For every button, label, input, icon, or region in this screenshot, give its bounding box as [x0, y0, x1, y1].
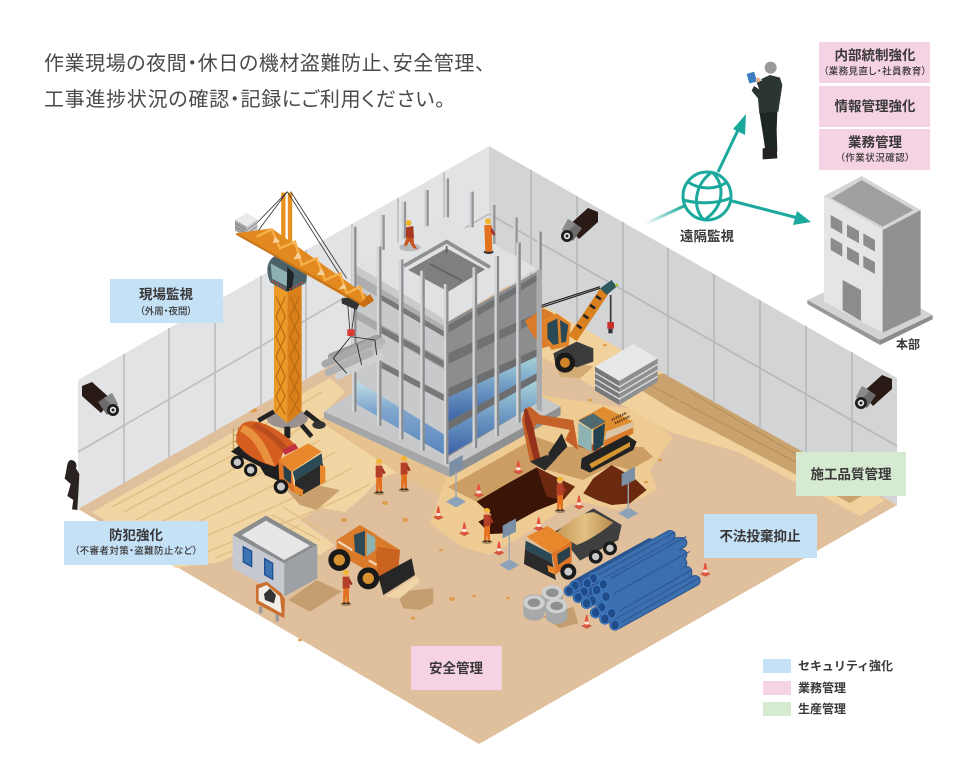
icon: globe — [683, 172, 731, 220]
excavator: boom — [522, 407, 578, 462]
label panel: information management: 情報管理強化 — [834, 98, 916, 114]
label panel: site monitoring: 現場監視 — [139, 286, 193, 302]
manager: hand — [756, 78, 760, 82]
mobile crane: rear body — [525, 308, 553, 348]
excavator: far crawler — [548, 433, 567, 464]
wall: left — [78, 146, 489, 509]
crane: cabin — [267, 254, 307, 292]
excavator — [522, 407, 637, 473]
head office building — [807, 176, 933, 351]
dump truck: bed — [555, 508, 622, 561]
head office: windows — [831, 215, 875, 274]
worker: standing on top floor — [484, 218, 496, 254]
legend: production: 生産管理 — [798, 701, 846, 716]
ground: shaded wood beneath excavator — [448, 437, 653, 502]
legend: business: 業務管理 — [798, 680, 846, 695]
manager: jacket — [752, 75, 782, 113]
excavator: bucket — [530, 455, 557, 471]
label: remote monitoring: 遠隔監視 — [680, 228, 734, 244]
mixer truck: drum — [236, 421, 298, 467]
camera: left wall — [82, 382, 119, 416]
remote monitoring network — [645, 114, 811, 244]
label panel: business management: 業務管理 — [848, 134, 902, 150]
label panel: illegal dumping: 不法投棄抑止 — [720, 528, 800, 544]
crane: trolley and hook — [342, 298, 359, 336]
building: left face — [355, 265, 447, 462]
mixer truck: chassis — [231, 445, 280, 482]
mobile crane: shadow — [553, 358, 593, 378]
bulldozer: shadow — [397, 588, 433, 610]
label panel: safety management: 安全管理 — [429, 660, 483, 676]
excavation site — [477, 407, 647, 534]
camera: right wall — [855, 375, 892, 409]
label panel: internal control: 内部統制強化 — [834, 47, 916, 63]
building: slab — [324, 340, 561, 477]
ground — [78, 273, 897, 744]
arrow: to manager — [718, 114, 746, 172]
crane: counterweight — [235, 213, 257, 237]
label panel: illegal dumping — [704, 514, 817, 558]
traffic cones — [433, 461, 711, 629]
mixer truck: shadow — [287, 485, 340, 510]
manager: legs — [759, 112, 777, 152]
ground: tan strip around slab — [318, 408, 450, 495]
building: top floor with opening — [357, 217, 537, 322]
dump truck — [524, 508, 622, 580]
bulldozer: blade — [378, 558, 415, 595]
excavation: dirt pile — [583, 465, 647, 505]
slab stack — [595, 344, 658, 405]
ground: dots — [249, 344, 682, 641]
mixer truck: ladder — [233, 427, 238, 452]
label panel: business management — [819, 129, 930, 170]
dump truck: wheels — [560, 541, 617, 580]
bulldozer: body — [337, 525, 400, 577]
mobile crane: chassis and wheel — [553, 342, 593, 373]
bulldozer: dirt — [385, 577, 420, 598]
head office: left face — [824, 196, 883, 333]
title: 工事進捗状況の確認・記録にご利用ください。 — [44, 88, 445, 111]
label panel: site monitoring: （外周・夜間） — [140, 306, 192, 318]
arrow: to head office — [732, 201, 811, 225]
ground: wood around building and pit — [430, 395, 673, 555]
label panel: crime prevention: 防犯強化 — [109, 527, 163, 543]
site signs — [446, 455, 638, 571]
legend — [763, 658, 893, 716]
label panel: business management: （作業状況確認） — [840, 152, 910, 164]
label panel: construction quality: 施工品質管理 — [810, 466, 892, 482]
site office: roof — [233, 516, 317, 563]
label panel: crime prevention — [64, 521, 208, 565]
manager: shoes — [763, 147, 777, 159]
bulldozer — [328, 525, 433, 610]
site sign — [256, 582, 285, 622]
wall: right — [489, 146, 897, 505]
person silhouette at wall — [65, 460, 79, 510]
head office: right face — [883, 210, 921, 333]
ground: wood band along right wall — [520, 292, 885, 516]
site office: shadow — [288, 580, 342, 612]
ground: dark wood band along right wall — [630, 372, 872, 503]
head office: roof — [824, 176, 921, 230]
building: front columns — [353, 227, 541, 464]
excavator: cab — [578, 413, 606, 452]
head office: base — [807, 275, 933, 345]
mobile crane: boom — [542, 280, 618, 338]
manager: head — [765, 62, 777, 74]
dump truck: load — [557, 512, 613, 545]
site office: walls — [233, 535, 317, 597]
label panel: internal control — [819, 42, 930, 83]
label panel: safety management — [411, 646, 502, 690]
label panel: crime prevention: （不審者対策・盗難防止など） — [74, 545, 198, 557]
site office: windows — [243, 547, 273, 579]
crane: base — [258, 408, 326, 438]
head office: door — [843, 280, 861, 321]
building: back columns — [381, 178, 517, 255]
title — [44, 52, 485, 111]
label panel: site monitoring — [110, 279, 223, 323]
crane: mast — [283, 193, 290, 243]
excavation: pit — [477, 467, 575, 534]
dump truck: cab — [524, 526, 572, 580]
building under construction — [324, 178, 561, 477]
concrete rings — [523, 585, 578, 628]
label panel: internal control: （業務見直し・社員教育） — [824, 66, 926, 78]
bulldozer: cab — [352, 526, 377, 563]
ground: wood area left — [92, 378, 407, 568]
manager with tablet — [747, 62, 782, 159]
arrow: incoming line — [645, 206, 684, 224]
mixer truck: wheels — [231, 456, 288, 494]
mobile crane and slab stack — [525, 270, 658, 410]
mixer truck — [231, 421, 340, 510]
tower crane — [235, 192, 383, 438]
mobile crane: cab — [543, 313, 571, 350]
excavator: body — [578, 407, 633, 453]
mobile crane: column in front — [531, 270, 547, 410]
bulldozer: wheels — [328, 549, 379, 589]
crane: jib — [235, 228, 374, 307]
crane: cables — [248, 192, 347, 278]
site office — [233, 516, 342, 622]
building: right face — [448, 272, 537, 457]
mixer truck: cab — [278, 443, 325, 496]
legend: security: セキュリティ強化 — [798, 658, 893, 673]
label: head office: 本部 — [896, 336, 920, 351]
title: 作業現場の夜間・休日の機材盗難防止、安全管理、 — [44, 52, 485, 75]
camera: back wall — [561, 208, 598, 242]
workers on the ground — [341, 456, 567, 606]
blue pipes — [565, 532, 698, 630]
excavator: near crawler — [581, 435, 637, 473]
label panel: information management — [819, 86, 930, 127]
worker: kneeling on top floor — [399, 220, 421, 251]
label panel: construction quality — [796, 452, 906, 496]
manager: tablet — [747, 72, 757, 83]
crane: suspended pipe bundle — [325, 337, 383, 376]
crane: tower — [274, 283, 302, 423]
ground: wood grain left — [112, 392, 370, 558]
